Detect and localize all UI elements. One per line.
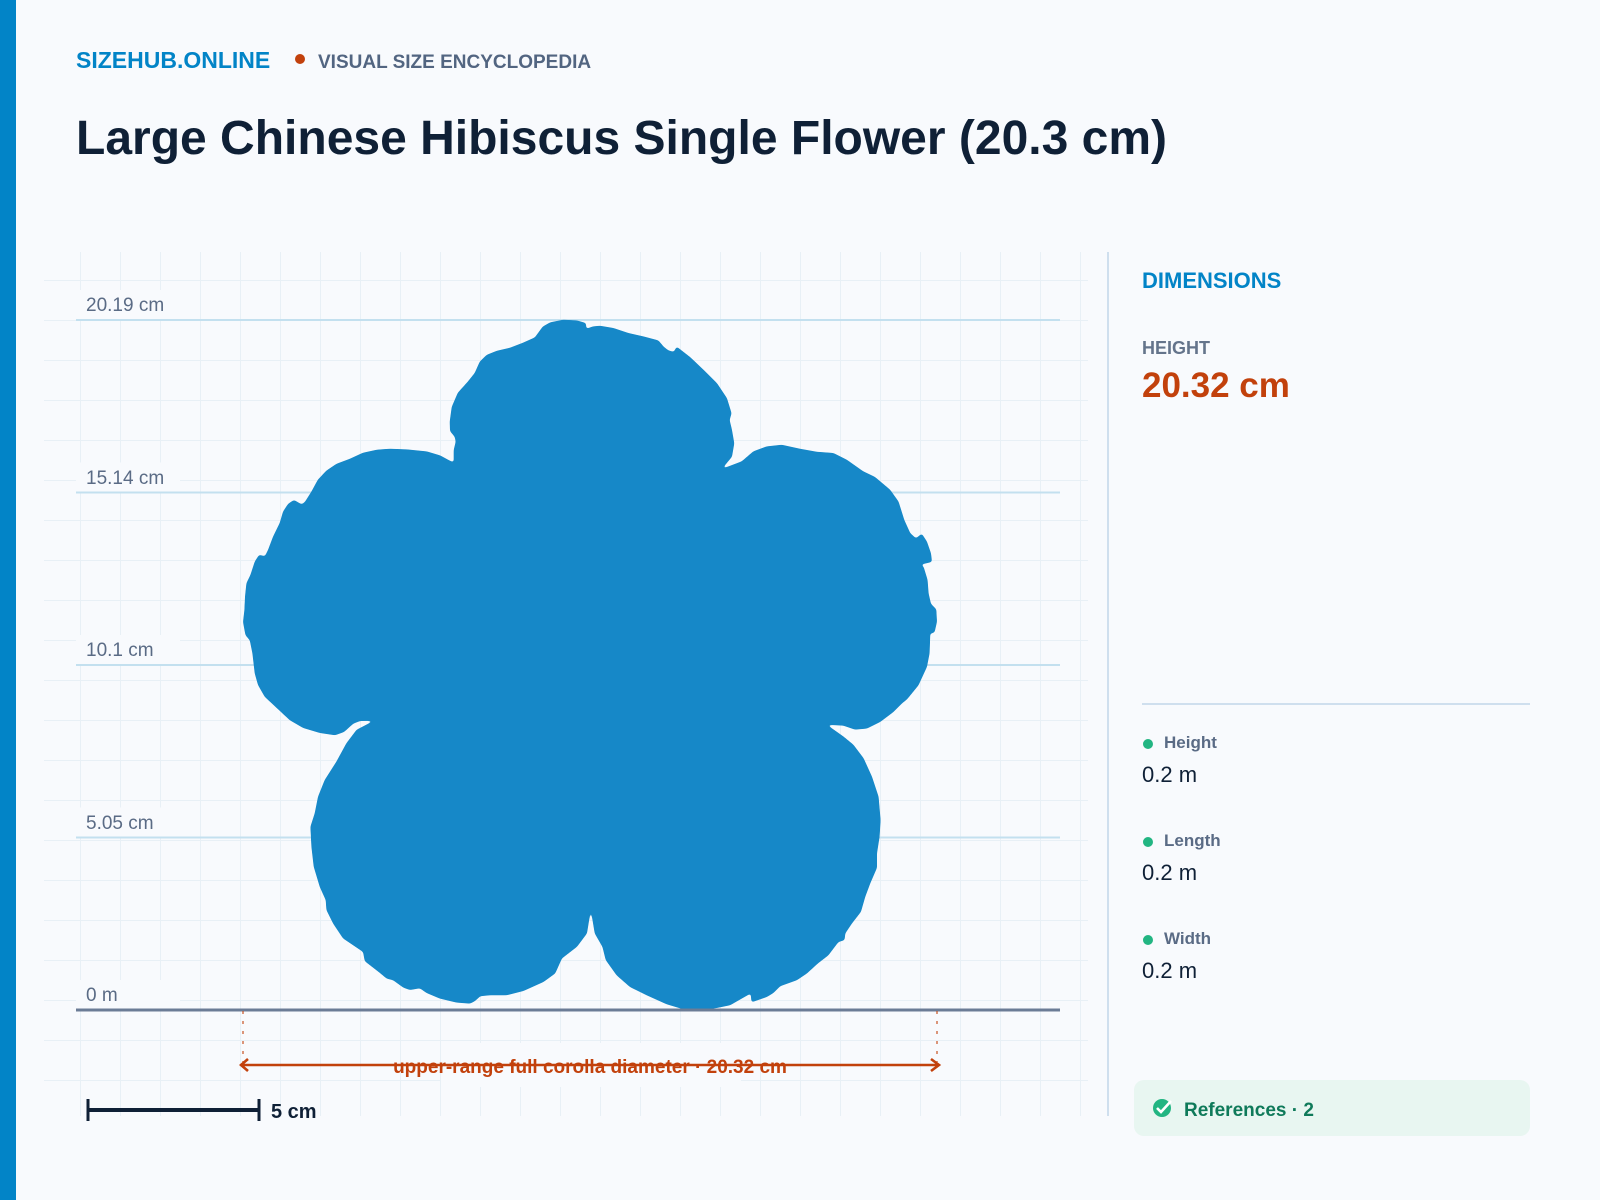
brand name: SIZEHUB.ONLINE [76, 47, 270, 73]
metrics list [1142, 733, 1221, 983]
diameter caption: upper-range full corolla diameter · 20.32 cm [393, 1057, 787, 1078]
metric: width [1142, 929, 1211, 983]
brand dot [295, 54, 305, 64]
hibiscus flower silhouette [243, 320, 937, 1010]
diameter dimension [241, 1011, 939, 1078]
header [76, 47, 591, 73]
metric: width: 0.2 m [1142, 958, 1197, 983]
height axis labels [86, 295, 164, 1006]
scale bar line [88, 1108, 260, 1112]
icon: check circle [1153, 1099, 1171, 1117]
label: 0 m: 0 m [86, 985, 118, 1006]
metric: length: Length [1164, 831, 1221, 850]
label: 20.19 cm: 20.19 cm [86, 295, 164, 316]
height value: 20.32 cm [1142, 366, 1290, 405]
references text: References · 2 [1184, 1100, 1314, 1121]
height label: HEIGHT [1142, 338, 1210, 358]
scale bar label: 5 cm [271, 1101, 317, 1123]
double-headed arrow [241, 1059, 939, 1071]
metric: length [1142, 831, 1221, 885]
label: 5.05 cm: 5.05 cm [86, 813, 154, 834]
dimensions heading: DIMENSIONS [1142, 268, 1281, 293]
metric: height: 0.2 m [1142, 762, 1197, 787]
accent bar [0, 0, 16, 1200]
dotted extension lines [243, 1011, 937, 1062]
metric: length: 0.2 m [1142, 860, 1197, 885]
label: 15.14 cm: 15.14 cm [86, 468, 164, 489]
label: 10.1 cm: 10.1 cm [86, 640, 154, 661]
scale bar ticks [88, 1099, 259, 1121]
title: Large Chinese Hibiscus Single Flower (20.3 cm) [76, 112, 1167, 165]
panel: dimensions [1142, 268, 1290, 405]
sidebar divider [1107, 252, 1109, 1116]
references badge [1134, 1080, 1530, 1136]
metric: height [1142, 733, 1217, 787]
metric: height: Height [1164, 733, 1217, 752]
tagline: VISUAL SIZE ENCYCLOPEDIA [318, 52, 591, 73]
ground baseline [76, 1008, 1060, 1012]
scale bar [88, 1099, 317, 1123]
metric: width: Width [1164, 929, 1211, 948]
